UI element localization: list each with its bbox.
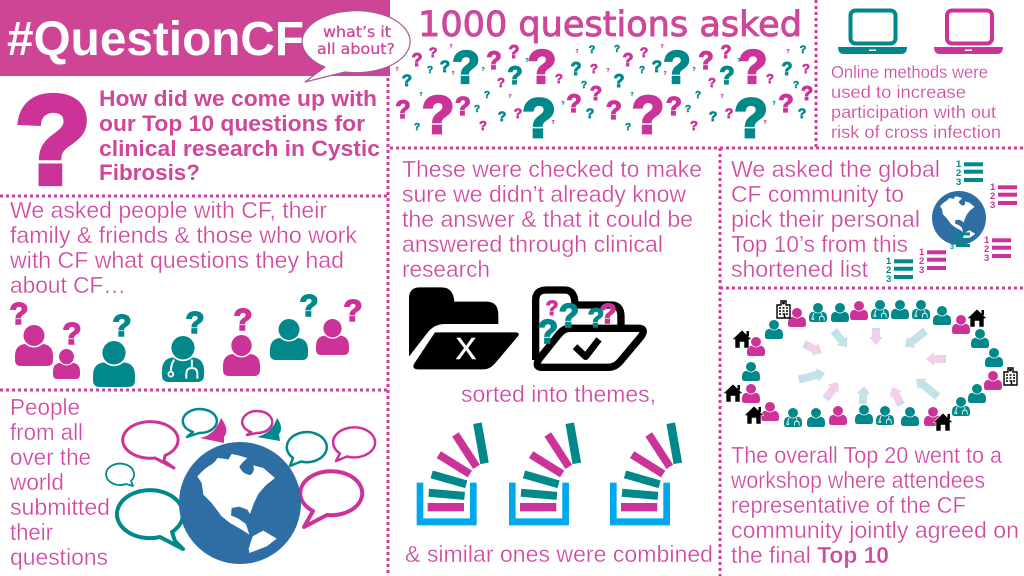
heading question [99, 86, 380, 185]
text: who we asked: We asked people with CF, their [10, 197, 327, 223]
icon: magenta list lower left [919, 247, 946, 276]
text: checking questions: answered through clinical [402, 231, 663, 257]
text: people from all over: their [10, 519, 53, 545]
cloud of question marks: ? [440, 57, 450, 76]
text: people from all over: questions [10, 544, 108, 570]
heading question: our Top 10 questions for [99, 111, 365, 136]
cloud of question marks: ? [484, 90, 490, 101]
cloud of question marks: ? [498, 108, 506, 124]
cloud of question marks: ? [561, 101, 565, 107]
icon: teal list on globe: 2 [950, 238, 954, 245]
icon: large question mark: ? [15, 72, 91, 210]
text: global community [731, 156, 940, 282]
text: workshop: representative of the CF [731, 492, 966, 518]
icon: stack two [509, 423, 581, 525]
icon: magenta laptop [934, 10, 1003, 54]
text: workshop: the final Top 10 [731, 542, 889, 568]
heading question: clinical research in Cystic [99, 136, 380, 161]
panel: online methods [831, 10, 1003, 142]
cloud of question marks: ? [566, 90, 582, 118]
icon: teal list on globe: 1 [950, 231, 954, 238]
cloud of question marks: ? [586, 105, 594, 121]
people with question marks: ? [63, 316, 81, 351]
text: global community: Top 10’s from this [731, 231, 908, 257]
cloud of question marks: ? [528, 40, 556, 93]
text: who we asked: with CF what questions they had [9, 247, 344, 273]
cloud of question marks: ? [474, 104, 480, 115]
cloud of question marks: ? [782, 59, 792, 79]
icon: magenta list lower left: 1 [919, 247, 925, 258]
cloud of question marks: ? [614, 71, 624, 91]
icon: accepted folder with questions: ? [538, 313, 558, 350]
text: online methods: participation with out [831, 102, 996, 122]
cloud of question marks: ? [395, 67, 399, 73]
title: #QuestionCF [7, 13, 304, 66]
text: who we asked [9, 197, 357, 298]
cloud of question marks: ? [630, 92, 634, 98]
cloud of question marks: ? [551, 120, 555, 126]
cloud of question marks: ? [801, 83, 813, 105]
cloud of question marks: ? [720, 94, 724, 100]
cloud of question marks: ? [639, 65, 645, 76]
cloud of question marks: ? [690, 118, 698, 133]
icon: magenta list lower left: 2 [919, 256, 924, 267]
icon: stack three [610, 423, 682, 525]
cloud of question marks: ? [786, 49, 790, 55]
cloud of question marks: ? [720, 42, 732, 62]
cloud of question marks: ? [395, 96, 411, 124]
cloud of question marks: ? [660, 44, 664, 50]
cloud of question marks: ? [734, 87, 768, 149]
icon: teal list bottom [886, 256, 913, 285]
cloud of question marks: ? [581, 80, 587, 91]
cloud of question marks: ? [449, 44, 453, 50]
cloud of question marks: ? [497, 75, 505, 90]
icon: accepted folder with questions: ? [588, 303, 604, 333]
icon: globe [179, 442, 301, 564]
text: people from all over: over the [10, 444, 91, 470]
cloud of question marks: ? [555, 71, 563, 86]
icon: teal list bottom: 2 [886, 265, 891, 276]
cloud of question marks: ? [508, 94, 512, 100]
icon: teal laptop [838, 10, 907, 54]
cloud of question marks: ? [508, 42, 520, 62]
cloud of question marks: ? [708, 75, 716, 90]
icon: magenta list lower right: 1 [984, 235, 990, 246]
cloud of question marks: ? [412, 50, 422, 70]
people with question marks [10, 288, 362, 387]
cloud of question marks: ? [695, 90, 701, 101]
cloud of question marks: ? [725, 105, 733, 121]
text: checking questions: These were checked to make [402, 156, 702, 182]
icon: magenta list right: 1 [990, 182, 996, 193]
cloud of question marks: ? [402, 71, 412, 90]
icon: accepted folder with questions: ? [546, 297, 558, 320]
cloud of question marks: ? [614, 44, 620, 55]
cloud of question marks: ? [419, 92, 423, 98]
cloud of question marks: ? [606, 68, 610, 74]
text: people from all over: submitted [10, 494, 110, 520]
text: checking questions [402, 156, 702, 282]
cloud of question marks: ? [427, 65, 433, 76]
cloud of question marks: ? [451, 71, 455, 77]
people with question marks: ? [344, 293, 362, 328]
people with question marks: ? [186, 305, 204, 340]
cloud of question marks: ? [798, 105, 806, 121]
cloud of question marks [395, 40, 813, 149]
cloud of question marks: ? [766, 71, 774, 86]
text: online methods: risk of cross infection [831, 122, 1001, 142]
text: online methods: used to increase [831, 82, 966, 102]
icon: stack one [417, 423, 489, 525]
cloud of question marks: ? [522, 87, 556, 149]
cloud of question marks: ? [685, 104, 691, 115]
panel: global community top 10s [731, 156, 1017, 285]
panel: who we asked [9, 197, 362, 387]
cloud of question marks: ? [772, 101, 776, 107]
cloud of question marks: ? [422, 86, 454, 145]
cloud of question marks: ? [709, 108, 717, 124]
text: workshop: community jointly agreed on [731, 517, 1019, 543]
icon: teal list on globe [950, 231, 970, 251]
people with question marks: ? [300, 288, 318, 323]
icon: teal list bottom: 3 [886, 274, 891, 285]
text: people from all over: People [10, 394, 80, 420]
cloud of question marks: ? [589, 44, 596, 56]
cloud of question marks: ? [802, 61, 810, 76]
panel: how did we come up [15, 72, 380, 210]
icon: magenta list right [990, 182, 1017, 211]
heading question: Fibrosis? [99, 160, 200, 185]
cloud of question marks: ? [737, 58, 741, 64]
cloud of question marks: ? [763, 120, 767, 126]
icon: teal list top: 2 [956, 168, 961, 179]
cloud of question marks: ? [739, 40, 767, 93]
cloud of question marks: ? [632, 86, 664, 145]
cloud of question marks: ? [575, 49, 579, 55]
panel: workshop [723, 299, 1019, 568]
ring of workshop attendees [742, 299, 1003, 427]
arrows pointing inward [797, 325, 946, 408]
text: global community: shortened list [731, 256, 869, 282]
text: checking questions: sure we didn’t already know [402, 181, 686, 207]
heading question: How did we come up with [99, 86, 377, 111]
cloud of question marks: ? [719, 62, 735, 90]
cloud of question marks: ? [625, 122, 631, 133]
icon: magenta list right: 2 [990, 191, 995, 202]
text: checking questions: research [402, 256, 490, 282]
text: similar ones combined: & similar ones were combined [405, 541, 713, 567]
icon: teal list top [956, 159, 983, 188]
cloud of question marks: ? [486, 47, 502, 75]
text: sorted into themes: sorted into themes, [461, 381, 656, 407]
cloud of question marks: ? [590, 83, 602, 105]
text: global community: We asked the global [731, 156, 940, 182]
cloud of question marks: ? [652, 57, 662, 76]
cloud of question marks: ? [514, 105, 522, 121]
icon: accepted folder with questions [536, 290, 643, 367]
cloud of question marks: ? [479, 118, 487, 133]
cloud of question marks: ? [452, 42, 480, 93]
text: people from all over: world [9, 469, 64, 495]
cloud of question marks: ? [570, 59, 582, 79]
cloud of question marks: ? [778, 90, 794, 118]
cloud of question marks: ? [698, 47, 714, 75]
icon: rejected folder: X [456, 331, 477, 366]
text: people from all over [9, 394, 110, 570]
heading: 1000 questions asked: 1000 questions asked [418, 5, 802, 45]
icon: accepted folder with questions: ? [599, 298, 617, 329]
cloud of question marks: ? [455, 91, 471, 121]
text: global community: pick their personal [731, 206, 920, 232]
text: workshop: workshop where attendees [730, 467, 985, 493]
text: online methods [831, 62, 1001, 142]
speech bubble: what's it all about: what’s it [323, 23, 391, 41]
icon: magenta list lower right: 3 [984, 253, 989, 264]
cloud of question marks: ? [793, 80, 799, 91]
text: workshop [730, 442, 1019, 568]
speech bubbles around globe [106, 409, 375, 549]
speech bubble: what's it all about: all about? [317, 40, 395, 58]
cloud of question marks: ? [429, 44, 437, 60]
icon: teal list on globe: 3 [950, 244, 954, 251]
cloud of question marks: ? [622, 50, 634, 70]
icon: magenta list right: 3 [990, 200, 995, 211]
cloud of question marks: ? [525, 58, 529, 64]
text: global community: CF community to [731, 181, 904, 207]
icon: teal list top: 1 [956, 159, 962, 170]
text: who we asked: about CF… [10, 272, 126, 298]
icon: rejected folder [409, 287, 519, 369]
people with question marks: ? [234, 302, 252, 337]
cloud of question marks: ? [800, 44, 807, 56]
text: online methods: Online methods were [831, 62, 988, 82]
cloud of question marks: ? [692, 67, 696, 73]
header banner [0, 0, 390, 76]
cloud of question marks: ? [663, 71, 667, 77]
icon: magenta list lower right: 2 [984, 244, 989, 255]
cloud of question marks: ? [640, 44, 648, 60]
cloud of question marks: ? [481, 67, 485, 73]
icon: teal list top: 3 [956, 177, 961, 188]
icon: magenta list lower left: 3 [919, 265, 924, 276]
icons: homes and hospitals [723, 301, 1017, 431]
text: who we asked: family & friends & those who work [10, 222, 357, 248]
cloud of question marks: ? [663, 42, 691, 93]
people with question marks: ? [113, 308, 131, 343]
icon: small globe [932, 191, 986, 245]
cloud of question marks: ? [590, 61, 598, 76]
cloud of question marks: ? [414, 122, 420, 133]
people with question marks: ? [10, 296, 28, 331]
panel: people from all over the world [9, 394, 375, 570]
text: workshop: The overall Top 20 went to a [731, 442, 1002, 468]
text: people from all over: from all [10, 419, 83, 445]
icon: magenta list lower right [984, 235, 1011, 264]
panel: checked and sorted [402, 156, 713, 567]
speech bubble: what's it all about [302, 11, 410, 82]
icon: teal list bottom: 1 [886, 256, 892, 267]
cloud of question marks: ? [666, 91, 682, 121]
icon: accepted folder with questions: ? [559, 297, 579, 334]
text: checking questions: the answer & that it could be [402, 206, 693, 232]
cloud of question marks: ? [507, 62, 523, 90]
cloud of question marks: ? [606, 95, 622, 125]
